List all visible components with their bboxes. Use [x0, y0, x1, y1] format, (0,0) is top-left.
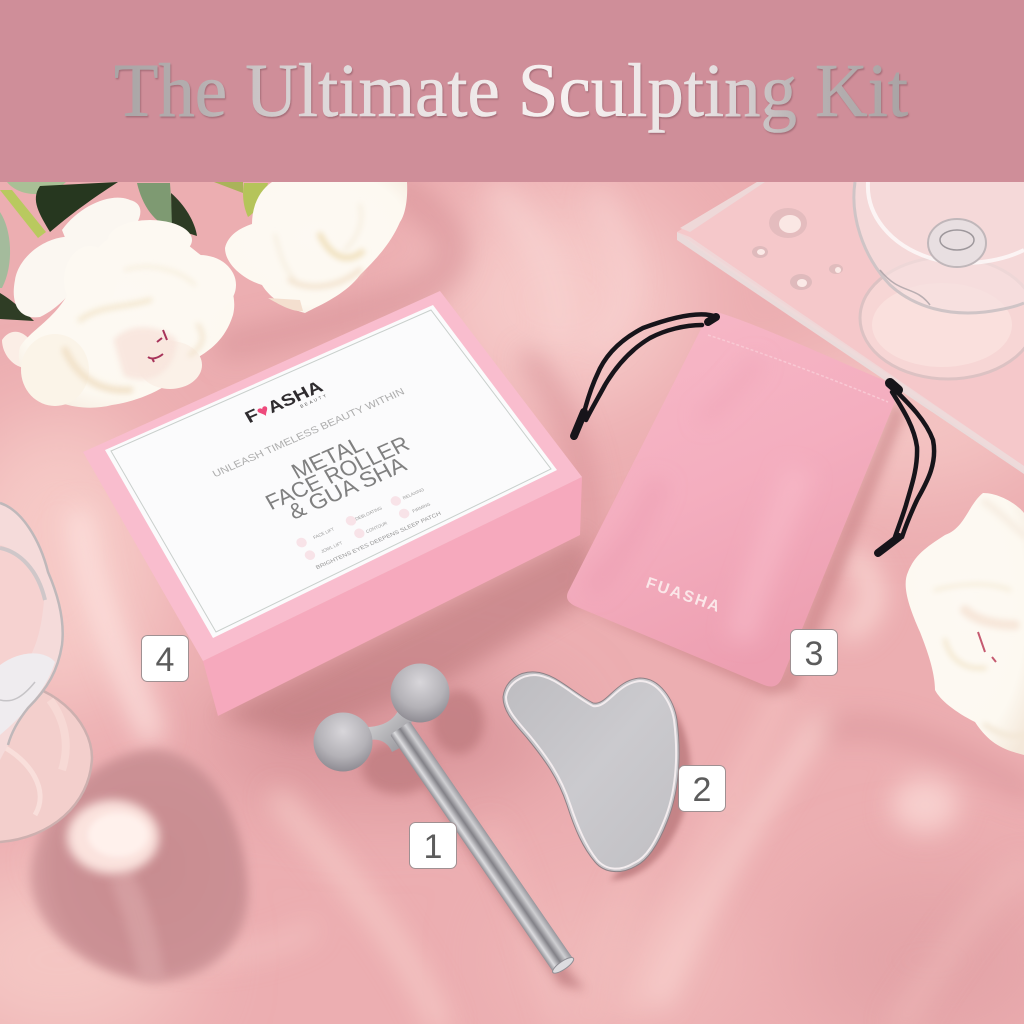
benefit list [312, 487, 434, 554]
number label 3 [790, 630, 838, 676]
glass bowl [0, 503, 63, 760]
back petals [62, 198, 140, 275]
gua sha [503, 672, 691, 880]
peony right edge [906, 493, 1024, 755]
number label 2 [678, 766, 726, 812]
roller neck [366, 706, 413, 752]
tagline: UNLEASH TIMELESS BEAUTY WITHIN [211, 387, 407, 480]
benefit list: FACE LIFT [312, 527, 335, 540]
peony: left large [2, 198, 236, 408]
number label 4 [142, 636, 188, 682]
benefit list: FIRMING [411, 501, 432, 514]
header band [0, 0, 1024, 182]
face roller [314, 664, 585, 990]
benefit list: CONTOUR [365, 520, 389, 534]
petal shading [65, 267, 203, 390]
gua sha shadow [610, 690, 691, 880]
peonies and leaves top left [0, 182, 407, 408]
drawstrings [574, 314, 934, 553]
number label 1: 1 [424, 828, 442, 866]
box [83, 291, 600, 740]
main bloom [19, 223, 234, 408]
number label 4: 4 [156, 641, 174, 679]
box front side [203, 477, 582, 716]
petal scallops [21, 220, 236, 406]
benefit list: DEBLOATING [354, 505, 383, 521]
brand logo: F♥ASHA [242, 377, 326, 427]
pouch logo: FUASHA [644, 575, 724, 616]
product name [252, 416, 422, 530]
product name: METAL [287, 432, 368, 484]
white label [105, 305, 557, 638]
benefit list: RELAXING [402, 487, 426, 500]
number label 3: 3 [805, 635, 823, 673]
number label 2: 2 [693, 771, 711, 809]
pouch [567, 312, 934, 695]
box lid top [83, 291, 582, 661]
gua sha body [503, 672, 679, 872]
shadow and light spot from left glass [30, 749, 248, 982]
title: The Ultimate Sculpting Kit [114, 49, 908, 133]
number label 1 [410, 822, 456, 868]
glass base [0, 682, 92, 842]
product name: & GUA SHA [284, 452, 411, 524]
roller balls [314, 712, 372, 772]
box label text [189, 349, 469, 589]
roller stem [390, 721, 576, 976]
footer line: BRIGHTENS EYES DEEPENS SLEEP PATCH [315, 511, 442, 571]
water drops [752, 208, 843, 290]
roller shadow [362, 690, 585, 990]
box cast shadow [218, 535, 600, 740]
beauty sub-logo: BEAUTY [299, 392, 329, 409]
pouch shadow [570, 400, 905, 695]
benefit list: JOWL LIFT [320, 540, 344, 554]
benefit icons [294, 494, 411, 562]
product name: FACE ROLLER [261, 431, 414, 515]
pouch body [567, 312, 895, 687]
glass dish top right [854, 182, 1024, 379]
leaves and stems [0, 182, 268, 321]
acrylic block with water drops [677, 182, 1024, 474]
peony: top centre [225, 182, 407, 313]
glass left [0, 503, 92, 842]
